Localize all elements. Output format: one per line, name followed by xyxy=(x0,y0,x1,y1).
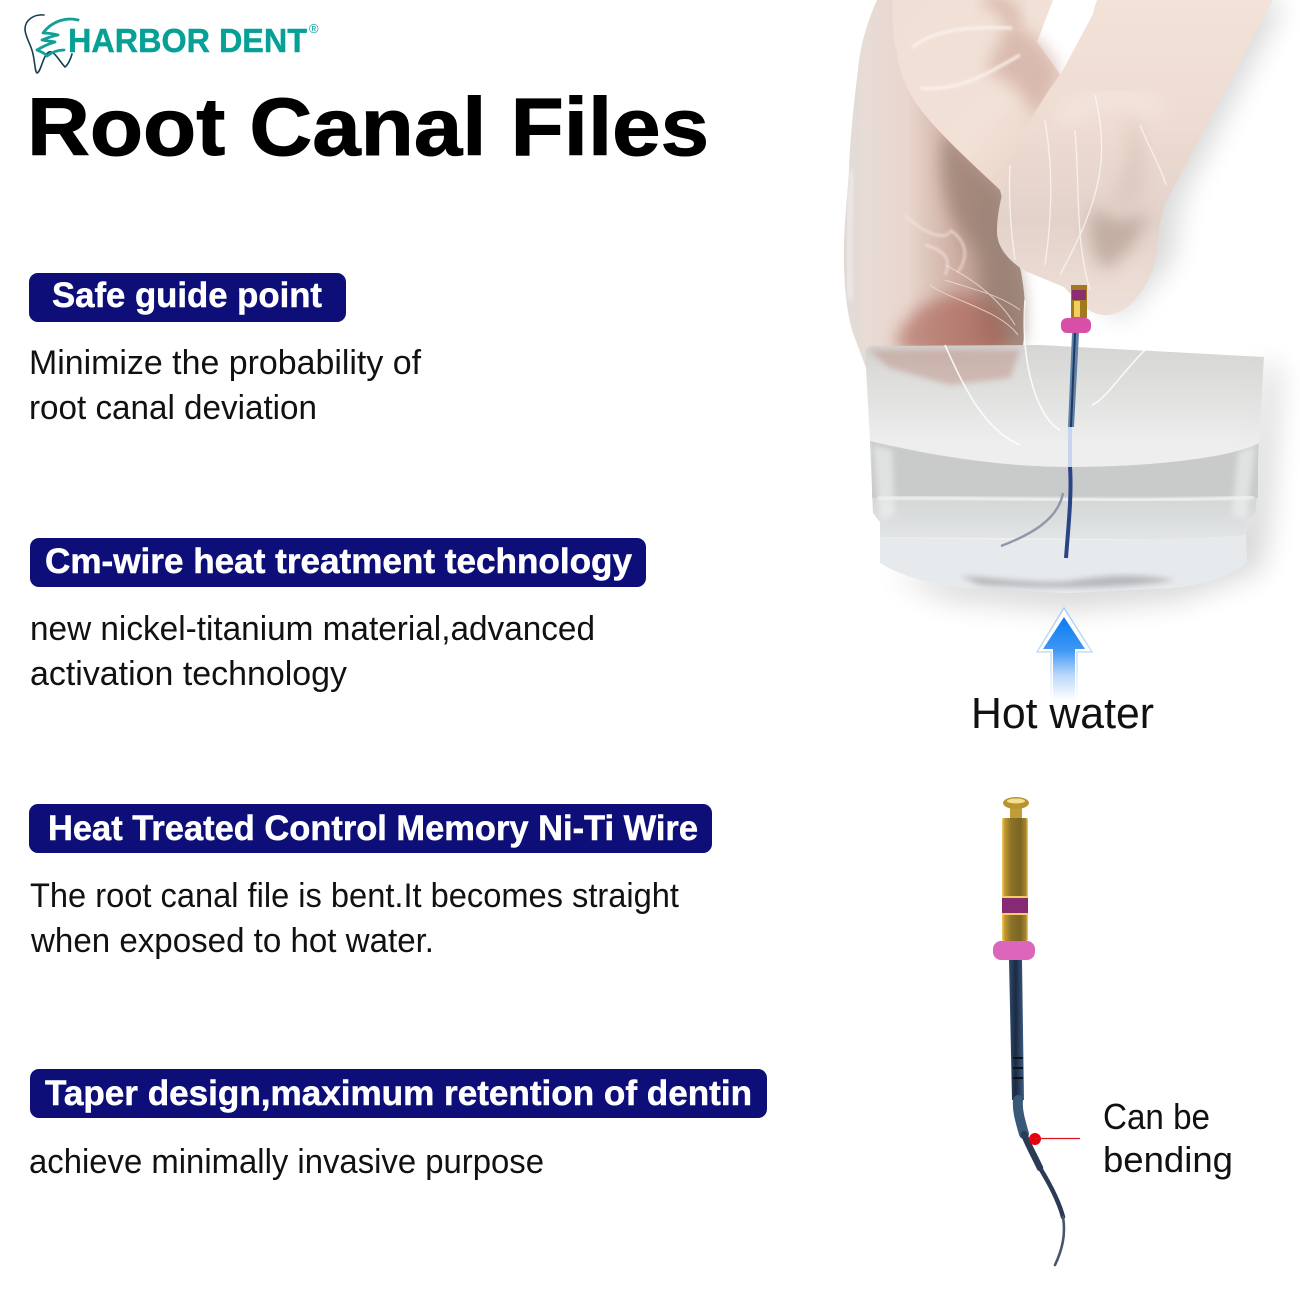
registered mark: ® xyxy=(309,21,319,36)
water band xyxy=(870,441,1259,540)
translucent side glass xyxy=(873,445,1256,520)
cup base xyxy=(880,535,1247,593)
title: Root Canal Files xyxy=(27,82,709,173)
red skin tone at fingertip xyxy=(895,295,1008,361)
label: hot water: Hot water xyxy=(971,689,1154,738)
water highlight line xyxy=(878,497,1254,500)
description: activation technology xyxy=(30,655,347,693)
description: new nickel-titanium material,advanced xyxy=(30,610,595,648)
description xyxy=(30,610,595,693)
reflected bent file xyxy=(1001,493,1063,546)
black shaft xyxy=(1009,960,1024,1100)
description: root canal deviation xyxy=(29,389,317,427)
callout text: bending xyxy=(1103,1139,1233,1180)
heading pill: Heat Treated Control Memory Ni-Ti Wire xyxy=(48,809,698,848)
file in fingers xyxy=(1001,285,1091,558)
description: when exposed to hot water. xyxy=(30,922,434,960)
description xyxy=(30,877,680,960)
callout text: Can be xyxy=(1103,1096,1210,1137)
refracted shaft glow xyxy=(1068,427,1072,467)
pink stopper xyxy=(1061,318,1091,333)
callout text xyxy=(1103,1096,1233,1180)
submerged file xyxy=(1066,467,1071,558)
feature block: control memory wire xyxy=(29,804,712,960)
red pointer xyxy=(1029,1133,1080,1145)
feature block: safe guide point xyxy=(29,273,422,427)
middle finger xyxy=(893,0,1060,192)
callout: can be bending xyxy=(1029,1096,1233,1180)
base reflection xyxy=(960,576,1175,588)
description: Minimize the probability of xyxy=(29,344,422,382)
feature block: taper design xyxy=(29,1069,767,1181)
cup body xyxy=(865,345,1264,593)
upper shaft xyxy=(1068,333,1079,427)
file handle xyxy=(1071,285,1087,318)
description: The root canal file is bent.It becomes straight xyxy=(30,877,680,915)
finger seen through cup xyxy=(868,350,1020,385)
brand name: HARBOR DENT xyxy=(68,22,307,59)
depth marks xyxy=(1013,1058,1023,1078)
arrow: heat rising xyxy=(1037,608,1092,700)
soft shadows xyxy=(890,0,1285,610)
bent tip xyxy=(1018,1100,1064,1265)
left finger xyxy=(844,0,1025,368)
description: achieve minimally invasive purpose xyxy=(29,1143,544,1181)
photo: gloved fingers and cup of water xyxy=(844,0,1285,610)
feature block: Cm-wire heat treatment xyxy=(30,538,646,693)
heading pill: Safe guide point xyxy=(52,276,322,315)
heading pill: Taper design,maximum retention of dentin xyxy=(45,1074,752,1113)
bent file product photo xyxy=(993,797,1064,1265)
heading pill: Cm-wire heat treatment technology xyxy=(45,542,633,581)
description xyxy=(29,344,422,427)
file tip knob xyxy=(1003,797,1029,819)
icon: tooth xyxy=(25,15,78,73)
purple band xyxy=(1002,896,1028,915)
heading pill xyxy=(29,273,346,322)
glove folds over cup xyxy=(945,300,1145,445)
right finger xyxy=(997,0,1273,315)
dark shaded side xyxy=(941,130,1024,345)
cup of water xyxy=(865,300,1264,593)
pink stopper xyxy=(993,941,1035,960)
gold handle xyxy=(1002,818,1028,941)
logo: Harbor Dent xyxy=(25,15,319,73)
glove creases xyxy=(905,215,965,275)
